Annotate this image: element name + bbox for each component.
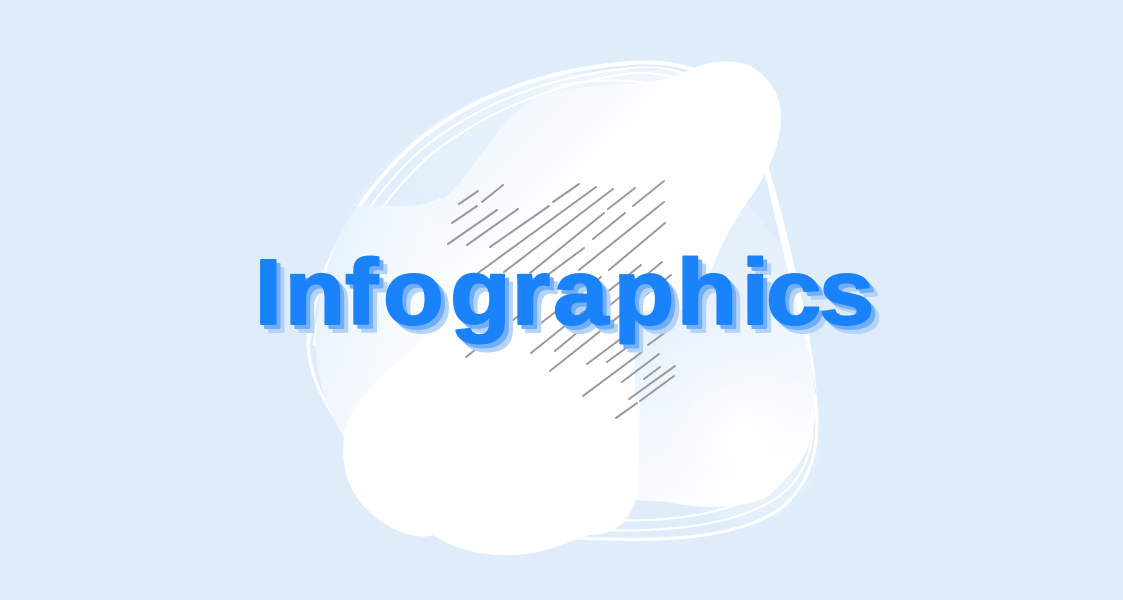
blob: right fill xyxy=(630,200,816,507)
blob: right soft highlight xyxy=(665,350,825,530)
title: Infographics: Infographics xyxy=(263,249,882,352)
blob: upper pale fill xyxy=(345,70,690,260)
title: Infographics: Infographics xyxy=(259,245,878,348)
blob: left fill xyxy=(316,197,470,440)
hatch lines xyxy=(448,181,675,418)
blob: bottom-right contour rings xyxy=(570,395,817,539)
blob: right ribbon xyxy=(763,160,817,400)
title: Infographics: Infographics xyxy=(255,241,874,344)
blob: top-left contour rings xyxy=(308,62,700,345)
blob: main white shape xyxy=(370,61,781,505)
blob: bottom white shape xyxy=(343,335,640,555)
blob: lower-left contour rings xyxy=(308,340,356,432)
